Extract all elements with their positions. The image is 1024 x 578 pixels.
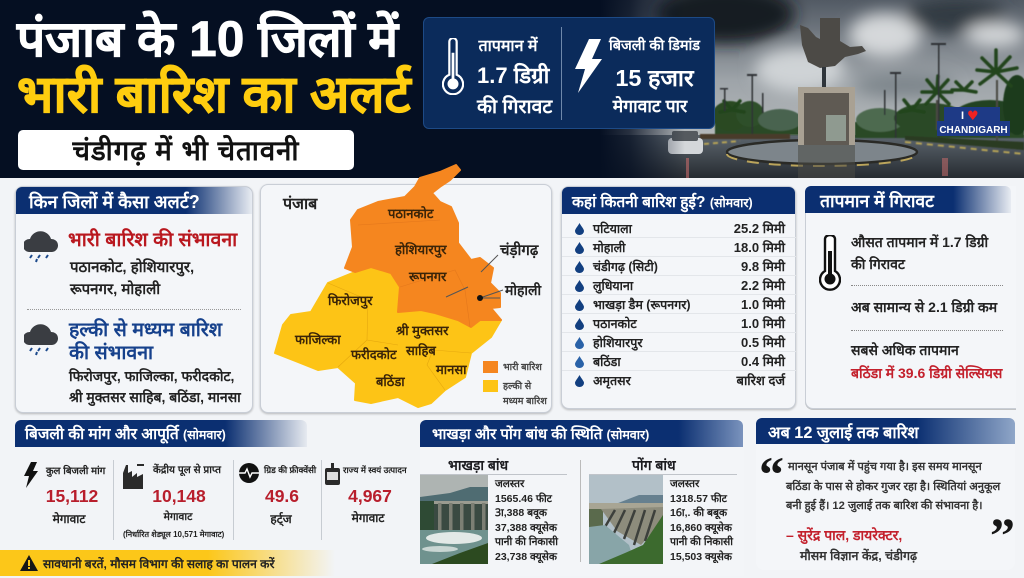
map title: पंजाब <box>282 195 318 213</box>
district labels: मानसा <box>435 362 467 377</box>
quote text: बनी हुई हैं। 12 जुलाई तक बारिश की संभावना है। <box>786 500 982 512</box>
photo: Bhakra dam <box>420 475 488 564</box>
icon: frequency pulse <box>239 463 259 483</box>
dam stats: 3ा,388 बवूक <box>495 507 547 519</box>
rainfall rows: पटियाला <box>593 222 632 236</box>
rainfall rows: 25.2 मिमी <box>734 221 785 236</box>
palms <box>720 50 1017 112</box>
icon: lightning <box>24 462 38 488</box>
rainfall rows: 9.8 मिमी <box>741 259 785 274</box>
metric: central pool: केंद्रीय पूल से प्राप्त <box>153 465 221 476</box>
panel: temperature drop <box>805 186 1016 409</box>
heading: अब 12 जुलाई तक बारिश <box>768 424 919 442</box>
quote text: बठिंडा के पास से होकर गुजर रहा है। स्थितियां अनुकूल <box>786 480 1000 492</box>
alert: heavy rain: भारी बारिश की संभावना <box>68 229 237 251</box>
stat: power demand: 15 हजार <box>615 65 694 91</box>
callout: Mohali: मोहाली <box>504 282 543 298</box>
dam stats <box>494 478 558 564</box>
opening quote mark: “ <box>759 446 784 502</box>
metric: central pool: मेगावाट <box>164 511 192 523</box>
heading <box>420 420 743 447</box>
metric: grid frequency: 49.6 <box>265 486 299 506</box>
dam stats: जलस्तर <box>670 478 699 490</box>
attribution: मौसम विज्ञान केंद्र, चंडीगढ़ <box>800 549 917 563</box>
metric: total demand <box>24 462 106 526</box>
dam stats: पानी की निकासी <box>495 536 558 548</box>
metric: grid frequency: ग्रिड की फ्रीक्वेंसी <box>264 465 316 475</box>
closing quote mark: ” <box>990 507 1015 563</box>
header banner <box>0 0 1024 178</box>
car <box>668 138 703 154</box>
callout: Chandigarh: चंड़ीगढ़ <box>499 241 539 259</box>
hedges and kerbs <box>700 134 790 139</box>
rainfall rows <box>562 221 796 389</box>
dam name: भाखड़ा बांध <box>448 457 508 473</box>
district labels: पठानकोट <box>387 206 434 221</box>
metric: grid frequency <box>239 463 316 526</box>
district labels: फाजिल्का <box>294 332 341 347</box>
I love Chandigarh sign: ♥ <box>967 109 979 124</box>
monument hand <box>798 18 866 145</box>
metric: own generation: 4,967 <box>348 486 392 506</box>
icon: power plant <box>123 464 144 489</box>
photo: Pong dam <box>589 475 663 564</box>
icon: thermometer <box>442 38 464 95</box>
text: highest temperature <box>850 342 1003 381</box>
icon: warning triangle <box>20 555 38 571</box>
title line 1: पंजाब के 10 जिलों में <box>17 11 398 67</box>
attribution: – सुरेंद्र पाल, डायरेक्टर, <box>786 527 902 543</box>
subtitle pill <box>18 130 354 170</box>
metric: central pool: (निर्धारित शेड्यूल 10,571 मेगावाट) <box>123 530 224 539</box>
subtitle pill: चंडीगढ़ में भी चेतावनी <box>72 135 300 166</box>
stat: power demand: मेगावाट पार <box>613 96 687 116</box>
legend: मध्यम बारिश <box>502 395 547 407</box>
metric: own generation <box>325 463 407 525</box>
dam stats: 1318.57 फीट <box>670 493 727 505</box>
dam stats: 16,860 क्यूसेक <box>670 522 732 534</box>
stat: temperature drop: तापमान में <box>479 38 537 55</box>
district labels: श्री मुक्तसर <box>395 323 449 339</box>
panel: rainfall list <box>561 186 796 409</box>
heading: तापमान में गिरावट <box>820 191 934 211</box>
metric: grid frequency: हर्ट्ज <box>270 512 292 526</box>
metric: total demand: मेगावाट <box>53 512 85 526</box>
heading: बिजली की मांग और आपूर्ति (सोमवार) <box>25 426 226 443</box>
rainfall rows: मोहाली <box>593 241 625 255</box>
alert: heavy rain: रूपनगर, मोहाली <box>70 281 160 298</box>
metric: total demand: कुल बिजली मांग <box>46 466 105 477</box>
panel: dam status <box>420 420 744 576</box>
text: below normal: अब सामान्य से 2.1 डिग्री कम <box>851 299 997 315</box>
heading: भाखड़ा और पोंग बांध की स्थिति (सोमवार) <box>432 426 649 443</box>
text: average drop: औसत तापमान में 1.7 डिग्री <box>851 234 988 250</box>
I love Chandigarh sign: CHANDIGARH <box>939 125 1008 136</box>
stat: power demand <box>608 36 700 116</box>
dam stats <box>670 478 734 564</box>
icon: generator <box>325 463 340 485</box>
alert: heavy rain <box>68 228 238 298</box>
rainfall rows: बठिंडा <box>593 355 621 369</box>
text: average drop <box>850 234 989 272</box>
alert: light to moderate rain <box>68 318 242 406</box>
attribution <box>786 527 918 563</box>
icon: lightning bolt <box>575 39 602 93</box>
rainfall rows: 0.4 मिमी <box>741 354 785 369</box>
icon: thermometer <box>819 235 841 291</box>
alert: heavy rain: पठानकोट, होशियारपुर, <box>70 259 194 276</box>
rainfall rows: 1.0 मिमी <box>741 297 785 312</box>
rainfall rows: लुधियाना <box>593 279 633 293</box>
district labels: रूपनगर <box>408 269 447 284</box>
rainfall rows: बारिश दर्ज <box>737 373 785 388</box>
text: highest temperature: सबसे अधिक तापमान <box>851 342 959 358</box>
dam stats: 15,503 क्यूसेक <box>670 551 732 563</box>
rainfall rows: पठानकोट <box>593 317 637 331</box>
photo: Chandigarh Open Hand monument in rain <box>607 0 1024 178</box>
alert: light to moderate rain: की संभावना <box>69 342 153 364</box>
panel: Punjab map <box>260 184 552 413</box>
warning bar <box>0 550 335 576</box>
dam name: पोंग बांध <box>632 457 676 473</box>
district labels: फरीदकोट <box>350 347 397 362</box>
heading: कहां कितनी बारिश हुई? (सोमवार) <box>572 194 753 211</box>
rainfall rows: 2.2 मिमी <box>741 278 785 293</box>
panel: rain till July 12 <box>756 418 1015 570</box>
stat: temperature drop <box>476 36 553 118</box>
region: light to moderate rain <box>275 267 501 407</box>
icon: rain cloud <box>24 231 58 262</box>
heading <box>16 187 252 214</box>
panel: power demand and supply <box>15 420 407 540</box>
rainfall rows: 18.0 मिमी <box>734 240 785 255</box>
heading: किन जिलों में कैसा अलर्ट? <box>29 192 200 212</box>
Pong dam <box>589 457 737 564</box>
Bhakra dam <box>420 457 567 564</box>
panel: district alerts <box>15 186 253 413</box>
stat: temperature drop: 1.7 डिग्री <box>477 63 549 88</box>
dam stats: 23,738 क्यूसेक <box>495 551 557 563</box>
warning text: सावधानी बरतें, मौसम विभाग की सलाह का पालन करें <box>43 557 274 571</box>
district labels: होशियारपुर <box>394 242 447 258</box>
title line 2: भारी बारिश का अलर्ट <box>17 65 411 123</box>
stat box <box>423 17 715 129</box>
rainfall rows: होशियारपुर <box>593 336 642 350</box>
text: highest temperature: बठिंडा में 39.6 डिग्री सेल्सियस <box>851 365 1002 381</box>
map of Punjab <box>274 164 548 408</box>
quote text: मानसून पंजाब में पहुंच गया है। इस समय मानसून <box>788 461 982 473</box>
metric: central pool <box>123 464 224 540</box>
tree lines <box>715 120 800 135</box>
stat: temperature drop: की गिरावट <box>477 96 552 118</box>
heading <box>562 187 795 214</box>
dam stats: 16ा,. की बबूक <box>670 507 727 519</box>
divider <box>561 27 562 120</box>
text: average drop: की गिरावट <box>851 256 905 272</box>
rainfall rows: 0.5 मिमी <box>741 335 785 350</box>
alert: light to moderate rain: हल्की से मध्यम बारिश <box>69 319 222 341</box>
heading <box>15 420 307 447</box>
dam stats: जलस्तर <box>495 478 524 490</box>
roundabout <box>727 140 917 164</box>
metric: total demand: 15,112 <box>46 486 98 506</box>
alert: light to moderate rain: श्री मुक्तसर साहिब, बठिंडा, मानसा <box>69 389 241 405</box>
metric: own generation: राज्य में स्वयं उत्पादन <box>343 465 407 475</box>
rainfall rows: अमृतसर <box>593 374 631 388</box>
heading <box>756 418 1015 444</box>
region: heavy rain <box>345 165 501 327</box>
rainfall rows: भाखड़ा डैम (रूपनगर) <box>593 298 691 312</box>
metric: own generation: मेगावाट <box>352 511 384 525</box>
I love Chandigarh sign: I <box>961 110 964 122</box>
district labels <box>294 206 467 389</box>
dam stats: पानी की निकासी <box>670 536 733 548</box>
legend: हल्की से <box>502 380 532 392</box>
district labels: बठिंडा <box>375 373 405 389</box>
rainfall rows: 1.0 मिमी <box>741 316 785 331</box>
district labels: साहिब <box>405 343 436 358</box>
quote text <box>786 460 1001 513</box>
district labels: फिरोजपुर <box>327 293 373 309</box>
dam stats: 1565.46 फीट <box>495 493 552 505</box>
metric: central pool: 10,148 <box>152 486 206 506</box>
stat: power demand: बिजली की डिमांड <box>609 38 700 54</box>
legend <box>483 361 547 407</box>
legend: भारी बारिश <box>503 361 542 373</box>
rainfall rows: चंडीगढ़ (सिटी) <box>593 260 658 274</box>
heading <box>805 186 1011 213</box>
I love Chandigarh sign <box>937 107 1010 136</box>
icon: rain cloud <box>24 324 58 356</box>
alert: light to moderate rain: फिरोजपुर, फाजिल्का, फरीदकोट, <box>69 368 234 384</box>
dam stats: 37,388 क्यूसेक <box>495 522 557 534</box>
